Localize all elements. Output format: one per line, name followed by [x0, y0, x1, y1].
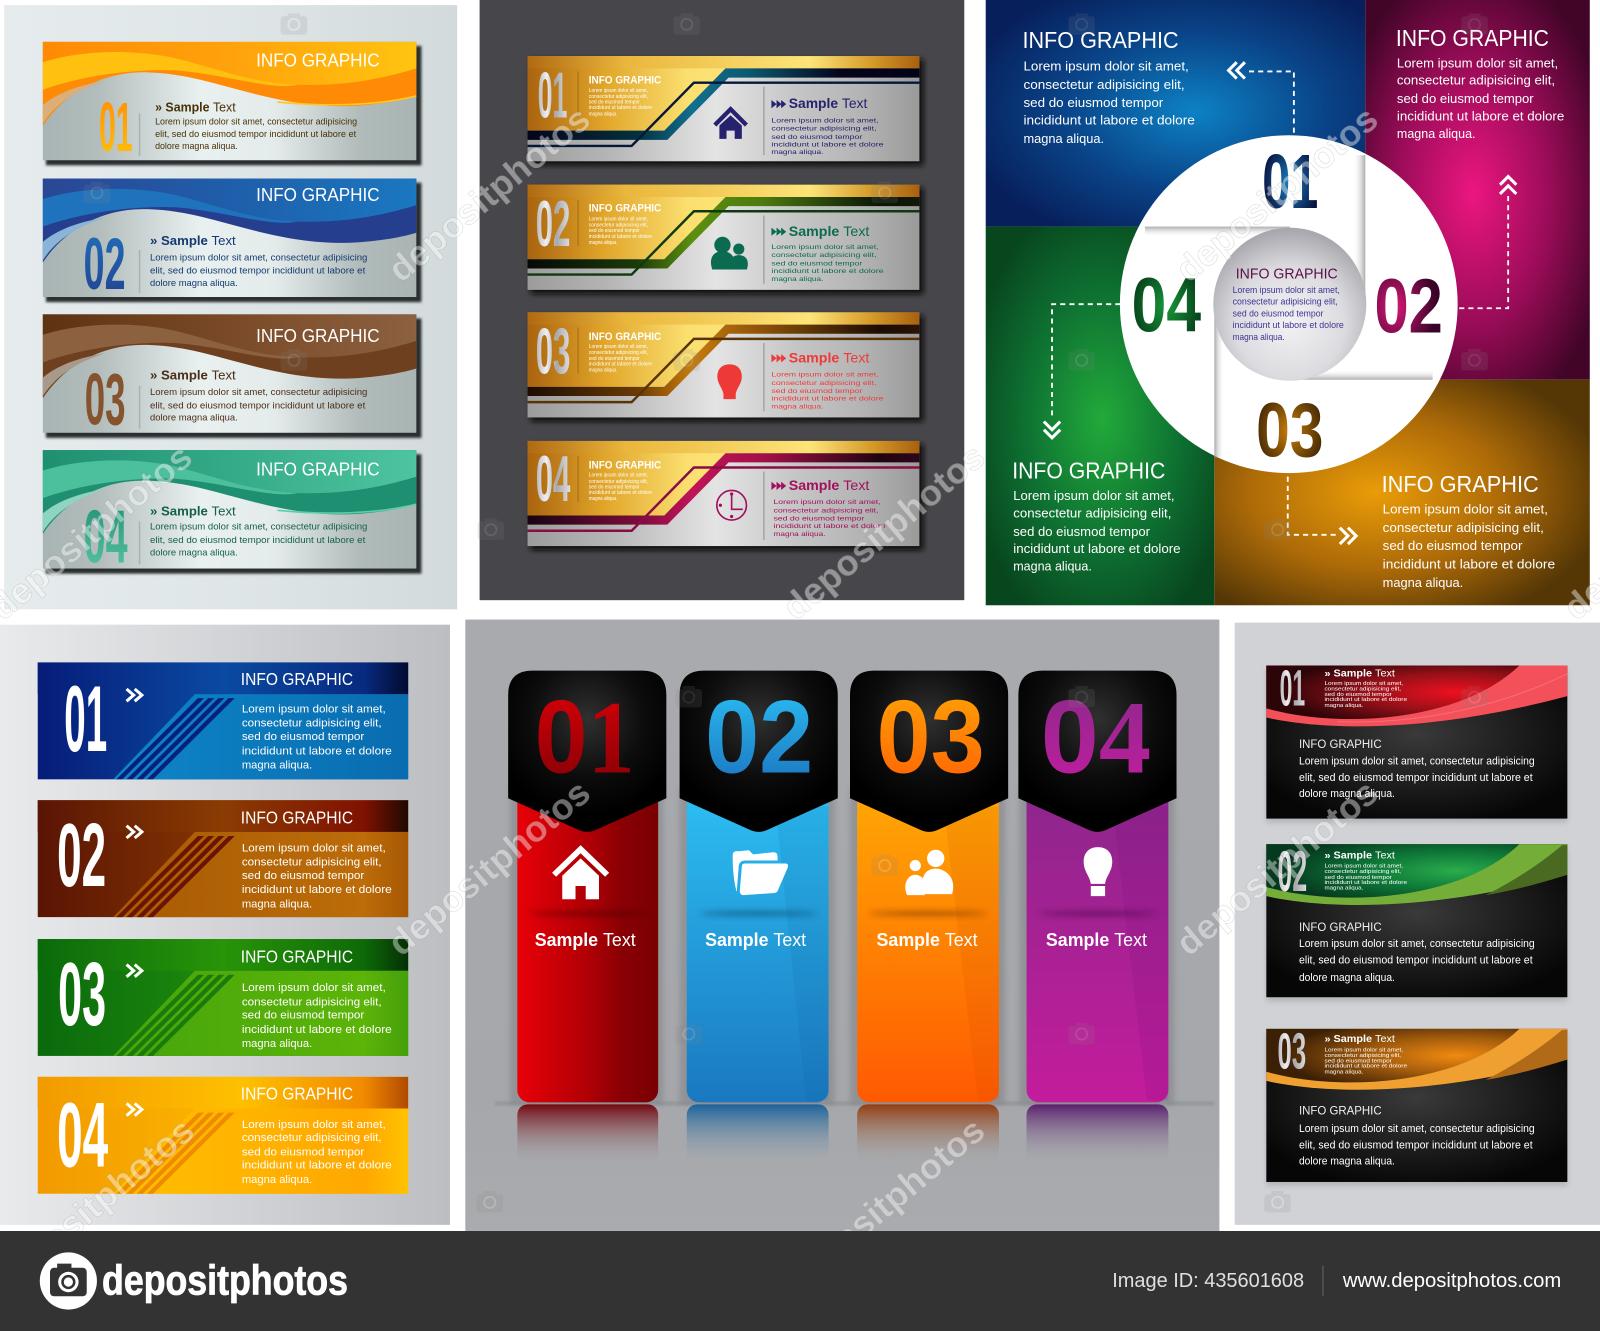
left caption: consectetur adipisicing elit,: [589, 223, 648, 229]
caption: incididunt ut labore et dolore: [1324, 1064, 1407, 1070]
icon: light bulb: [717, 364, 742, 399]
left caption: incididunt ut labore et dolore: [589, 234, 652, 240]
number: 02: [84, 222, 126, 305]
banner: gold 02 green: 02: [536, 187, 570, 260]
text block: [241, 1083, 392, 1186]
text block: dolore magna aliqua.: [1299, 788, 1395, 800]
text block: sed do eiusmod tempor: [242, 1146, 365, 1158]
left caption: magna aliqua.: [589, 368, 617, 374]
orange text block: INFO GRAPHIC: [1382, 471, 1539, 497]
label: Sample Text: [705, 929, 806, 950]
centre text: consectetur adipisicing elit,: [1233, 297, 1338, 307]
caption: Lorem ipsum dolor sit amet,: [1324, 681, 1403, 687]
text block: Lorem ipsum dolor sit amet,: [242, 842, 386, 854]
banner: red 01: 01: [1280, 659, 1305, 716]
heading: INFO GRAPHIC: [256, 49, 380, 70]
panel: gold metallic banners: [480, 0, 964, 600]
magenta text block: incididunt ut labore et dolore: [1397, 108, 1564, 123]
text block: [150, 233, 367, 288]
orange text block: sed do eiusmod tempor: [1383, 538, 1523, 553]
caption: consectetur adipisicing elit,: [1324, 687, 1401, 693]
heading: INFO GRAPHIC: [256, 459, 380, 480]
text block: [241, 947, 392, 1050]
right text block: consectetur adipisicing elit,: [771, 252, 877, 259]
chevrons: [127, 689, 142, 701]
caption: incididunt ut labore et dolore: [1324, 880, 1407, 886]
left caption: [589, 331, 661, 374]
panel: diagonal stripe banners: [0, 625, 450, 1225]
quadrant: orange: [1214, 380, 1590, 605]
text block: dolore magna aliqua.: [150, 547, 238, 557]
blue text block: consectetur adipisicing elit,: [1023, 77, 1185, 92]
panel: wave banners: [4, 5, 457, 609]
tab: orange 03: [850, 671, 1008, 1166]
text block: » Sample Text: [150, 233, 236, 248]
chevrons: [127, 965, 142, 977]
magenta text block: [1396, 25, 1564, 141]
right text block: Sample Text: [789, 350, 870, 365]
text block: incididunt ut labore et dolore: [242, 1160, 392, 1172]
text block: dolore magna aliqua.: [155, 141, 238, 151]
number: 03: [877, 680, 985, 796]
centre text: Lorem ipsum dolor sit amet,: [1233, 285, 1340, 295]
text block: Lorem ipsum dolor sit amet, consectetur adipisicing: [1299, 1123, 1535, 1135]
fold shadows: [1145, 155, 1433, 457]
green text block: [1012, 458, 1181, 574]
right text block: magna aliqua.: [773, 531, 826, 538]
text block: dolore magna aliqua.: [150, 278, 238, 288]
number: 02: [705, 680, 813, 796]
left caption: consectetur adipisicing elit,: [589, 94, 648, 100]
caption: magna aliqua.: [1324, 703, 1363, 709]
green text block: incididunt ut labore et dolore: [1013, 541, 1181, 556]
right text block: [771, 96, 884, 156]
icon: house: [713, 106, 748, 139]
caption: consectetur adipisicing elit,: [1324, 869, 1401, 875]
icon: people: [711, 237, 748, 269]
caption: [1324, 850, 1407, 892]
icon: clock: [717, 490, 746, 520]
right text block: consectetur adipisicing elit,: [773, 507, 879, 514]
icon: light bulb: [1084, 847, 1112, 896]
text block: [1299, 1105, 1535, 1168]
left caption: consectetur adipisicing elit,: [589, 350, 648, 356]
watermark: depositphotos text: depositphotos: [380, 98, 598, 290]
text block: Lorem ipsum dolor sit amet, consectetur adipisicing: [150, 522, 367, 532]
banner: red 01: [1266, 659, 1567, 823]
right text block: sed do eiusmod tempor: [771, 260, 863, 267]
left caption: magna aliqua.: [589, 111, 617, 117]
text block: dolore magna aliqua.: [150, 413, 238, 423]
orange text block: magna aliqua.: [1383, 575, 1463, 590]
banner: blue 01: 01: [64, 666, 107, 771]
blue text block: sed do eiusmod tempor: [1023, 95, 1164, 110]
right text block: Lorem ipsum dolor sit amet,: [773, 499, 881, 506]
watermark: depositphotos text: depositphotos: [380, 772, 598, 964]
panel: vertical tabs: [465, 620, 1219, 1231]
left caption: Lorem ipsum dolor sit amet,: [589, 88, 648, 94]
caption: » Sample Text: [1324, 850, 1395, 861]
number: 01: [535, 680, 635, 796]
left caption: sed do eiusmod tempor: [589, 356, 640, 362]
banner: teal 04: [43, 450, 421, 579]
right text block: incididunt ut labore et dolore: [771, 141, 884, 148]
caption: [1324, 669, 1407, 709]
left caption: Lorem ipsum dolor sit amet,: [589, 473, 648, 479]
green text block: magna aliqua.: [1013, 559, 1092, 574]
text block: » Sample Text: [150, 368, 236, 383]
text block: Lorem ipsum dolor sit amet, consectetur adipisicing: [155, 117, 357, 127]
text block: [1299, 738, 1535, 800]
blue text block: Lorem ipsum dolor sit amet,: [1023, 58, 1189, 73]
chevrons: [127, 826, 142, 838]
text block: elit, sed do eiusmod tempor incididunt ut labore et: [155, 129, 357, 139]
banner: orange 01: [43, 42, 421, 166]
banner: gold 03 red: 03: [536, 315, 570, 388]
caption: sed do eiusmod tempor: [1324, 692, 1392, 698]
right text block: [771, 350, 884, 410]
text block: Lorem ipsum dolor sit amet,: [242, 1119, 386, 1131]
right text block: Lorem ipsum dolor sit amet,: [771, 372, 879, 379]
orange text block: consectetur adipisicing elit,: [1383, 520, 1544, 535]
quadrant: blue: [986, 0, 1365, 227]
text block: Lorem ipsum dolor sit amet,: [242, 982, 386, 994]
chevrons: [127, 1103, 142, 1116]
right text block: magna aliqua.: [771, 276, 824, 283]
banner: green 02: [1266, 840, 1567, 1001]
number 02: 02: [1374, 265, 1443, 350]
number 03: 03: [1256, 388, 1323, 473]
text block: Lorem ipsum dolor sit amet, consectetur adipisicing: [150, 252, 367, 262]
footer bar: [0, 1231, 1600, 1331]
text block: consectetur adipisicing elit,: [242, 1132, 382, 1144]
text block: sed do eiusmod tempor: [242, 731, 365, 743]
heading: INFO GRAPHIC: [256, 325, 380, 346]
text block: INFO GRAPHIC: [1299, 738, 1382, 751]
text block: elit, sed do eiusmod tempor incididunt ut labore et: [150, 400, 366, 410]
blue text block: INFO GRAPHIC: [1022, 27, 1179, 53]
caption: Lorem ipsum dolor sit amet,: [1324, 864, 1403, 870]
centre text: sed do eiusmod tempor: [1233, 308, 1323, 318]
text block: elit, sed do eiusmod tempor incididunt ut labore et: [1299, 772, 1533, 784]
left caption: [589, 75, 661, 117]
banner: yellow 04: 04: [57, 1085, 108, 1187]
caption: [1324, 1034, 1407, 1075]
magenta text block: consectetur adipisicing elit,: [1397, 73, 1555, 88]
number: 03: [1278, 1023, 1306, 1080]
banner: green 02: 02: [1278, 840, 1307, 904]
left caption: magna aliqua.: [589, 240, 617, 246]
text block: [241, 669, 392, 772]
right text block: magna aliqua.: [771, 403, 824, 410]
caption: incididunt ut labore et dolore: [1324, 697, 1407, 703]
banner: orange 01: 01: [99, 88, 133, 166]
number 04: 04: [1132, 264, 1201, 349]
banner: gold 02 green: [528, 185, 923, 294]
banner: gold 01 navy: 01: [538, 58, 567, 131]
banner: brown 02: [38, 800, 408, 917]
label: Sample Text: [535, 929, 636, 950]
text block: Lorem ipsum dolor sit amet, consectetur adipisicing: [1299, 938, 1535, 950]
banner: orange 03: [1266, 1023, 1567, 1186]
banner: gold 01 navy: [528, 56, 923, 165]
text block: elit, sed do eiusmod tempor incididunt ut labore et: [1299, 955, 1533, 967]
right text block: incididunt ut labore et dolore: [771, 268, 884, 275]
right text block: Sample Text: [789, 478, 870, 493]
text block: INFO GRAPHIC: [1299, 1105, 1382, 1118]
watermark: depositphotos text: depositphotos: [1168, 98, 1385, 290]
image id: Image ID: 435601608: [1112, 1270, 1304, 1292]
left caption: incididunt ut labore et dolore: [589, 490, 652, 496]
text block: dolore magna aliqua.: [1299, 972, 1395, 984]
quadrant: green: [986, 227, 1214, 605]
caption: Lorem ipsum dolor sit amet,: [1324, 1047, 1403, 1053]
magenta text block: INFO GRAPHIC: [1396, 25, 1549, 51]
text block: Lorem ipsum dolor sit amet, consectetur adipisicing: [150, 387, 367, 397]
arrow: orange dashed: [1288, 477, 1356, 544]
centre text: [1233, 267, 1344, 342]
right text block: Sample Text: [789, 96, 868, 111]
text block: sed do eiusmod tempor: [242, 1010, 365, 1022]
green text block: consectetur adipisicing elit,: [1013, 505, 1171, 520]
watermark: depositphotos text: depositphotos: [775, 1110, 993, 1301]
left caption: [589, 202, 661, 246]
text block: Lorem ipsum dolor sit amet,: [242, 703, 386, 715]
number 01: 01: [1262, 140, 1318, 225]
text block: magna aliqua.: [242, 1038, 312, 1050]
banner: yellow 04: [38, 1077, 408, 1194]
caption: magna aliqua.: [1324, 886, 1363, 892]
number: 04: [84, 495, 128, 579]
right text block: Sample Text: [789, 224, 870, 239]
right text block: incididunt ut labore et dolore: [771, 396, 884, 403]
caption: consectetur adipisicing elit,: [1324, 1053, 1401, 1059]
white ring: [1120, 135, 1458, 473]
blue text block: [1022, 27, 1195, 146]
text block: [1299, 921, 1535, 984]
green text block: sed do eiusmod tempor: [1013, 524, 1151, 539]
text block: [150, 503, 367, 557]
left caption: consectetur adipisicing elit,: [589, 479, 648, 485]
text block: magna aliqua.: [242, 1174, 312, 1186]
label: Sample Text: [877, 929, 978, 950]
text block: » Sample Text: [155, 99, 236, 114]
icon: people: [905, 850, 953, 895]
blue text block: incididunt ut labore et dolore: [1023, 113, 1195, 128]
right text block: sed do eiusmod tempor: [771, 134, 863, 141]
centre text: INFO GRAPHIC: [1236, 267, 1338, 283]
text block: consectetur adipisicing elit,: [242, 718, 382, 730]
heading: INFO GRAPHIC: [256, 184, 380, 205]
caption: magna aliqua.: [1324, 1069, 1363, 1075]
green text block: Lorem ipsum dolor sit amet,: [1013, 488, 1174, 503]
icon: folder: [733, 850, 788, 895]
banner: blue 01: [38, 662, 408, 779]
right text block: Lorem ipsum dolor sit amet,: [771, 244, 879, 251]
text block: Lorem ipsum dolor sit amet, consectetur adipisicing: [1299, 756, 1535, 768]
text block: incididunt ut labore et dolore: [242, 884, 392, 896]
left caption: sed do eiusmod tempor: [589, 484, 640, 490]
orange text block: incididunt ut labore et dolore: [1383, 557, 1555, 572]
right text block: magna aliqua.: [771, 149, 824, 156]
arrow: magenta dashed: [1459, 177, 1516, 308]
text block: consectetur adipisicing elit,: [242, 857, 382, 869]
text block: INFO GRAPHIC: [241, 669, 353, 689]
logo mark: [40, 1252, 97, 1310]
caption: » Sample Text: [1324, 669, 1395, 680]
left caption: sed do eiusmod tempor: [589, 228, 640, 234]
text block: [155, 99, 357, 151]
text block: consectetur adipisicing elit,: [242, 996, 382, 1008]
left caption: Lorem ipsum dolor sit amet,: [589, 344, 648, 350]
green text block: INFO GRAPHIC: [1012, 458, 1165, 484]
right text block: incididunt ut labore et dolore: [773, 523, 886, 530]
text block: INFO GRAPHIC: [241, 947, 353, 967]
centre text: magna aliqua.: [1233, 332, 1285, 342]
banner: brown 02: 02: [57, 806, 106, 906]
banner: brown 03: 03: [85, 358, 126, 441]
text block: INFO GRAPHIC: [1299, 921, 1382, 934]
blue text block: magna aliqua.: [1023, 131, 1104, 146]
caption: » Sample Text: [1324, 1034, 1395, 1045]
tab: blue 02: [680, 671, 838, 1166]
left caption: INFO GRAPHIC: [589, 75, 661, 87]
left caption: INFO GRAPHIC: [589, 202, 661, 214]
text block: [150, 368, 367, 423]
left caption: INFO GRAPHIC: [589, 331, 661, 343]
watermark: camera marks: [84, 13, 1488, 1213]
text block: magna aliqua.: [242, 898, 312, 910]
text block: elit, sed do eiusmod tempor incididunt ut labore et: [150, 535, 366, 545]
caption: sed do eiusmod tempor: [1324, 1059, 1392, 1065]
banner: gold 04 crimson: 04: [536, 442, 570, 515]
tab: purple 04: [1018, 671, 1177, 1166]
text block: magna aliqua.: [242, 760, 312, 772]
right text block: consectetur adipisicing elit,: [771, 126, 877, 133]
left caption: Lorem ipsum dolor sit amet,: [589, 216, 648, 222]
right text block: sed do eiusmod tempor: [773, 516, 865, 523]
text block: elit, sed do eiusmod tempor incididunt ut labore et: [150, 266, 366, 276]
number: 04: [1041, 680, 1151, 796]
banner: green 03: [38, 939, 408, 1056]
right text block: consectetur adipisicing elit,: [771, 380, 877, 387]
arrow: green dashed: [1044, 304, 1120, 438]
magenta text block: magna aliqua.: [1397, 126, 1476, 141]
watermark: depositphotos text: depositphotos: [775, 436, 993, 628]
text block: dolore magna aliqua.: [1299, 1156, 1395, 1168]
left caption: incididunt ut labore et dolore: [589, 105, 652, 111]
text block: incididunt ut labore et dolore: [242, 745, 392, 757]
banner: brown 03: [43, 314, 421, 441]
text block: INFO GRAPHIC: [241, 808, 353, 828]
caption: sed do eiusmod tempor: [1324, 875, 1392, 881]
icon: house: [552, 845, 609, 899]
right text block: [771, 478, 886, 538]
arrow: blue dashed: [1229, 62, 1294, 133]
text block: INFO GRAPHIC: [241, 1083, 353, 1103]
text block: » Sample Text: [150, 503, 236, 518]
orange text block: Lorem ipsum dolor sit amet,: [1383, 501, 1548, 516]
logo wordmark: depositphotos: [102, 1256, 348, 1303]
text block: sed do eiusmod tempor: [242, 870, 365, 882]
banner: gold 04 crimson: [528, 441, 923, 550]
centre text: incididunt ut labore et dolore: [1233, 320, 1344, 330]
right text block: sed do eiusmod tempor: [771, 388, 863, 395]
website: www.depositphotos.com: [1342, 1270, 1561, 1292]
right text block: Lorem ipsum dolor sit amet,: [771, 117, 879, 124]
text block: [241, 808, 392, 910]
left caption: [589, 460, 661, 502]
tab: red 01: [508, 671, 666, 1166]
magenta text block: sed do eiusmod tempor: [1397, 91, 1534, 106]
magenta text block: Lorem ipsum dolor sit amet,: [1397, 55, 1558, 70]
panel: dark banners: [1235, 623, 1600, 1225]
banner: blue 02: [43, 179, 421, 305]
centre sphere: [1213, 228, 1366, 381]
label: Sample Text: [1046, 929, 1147, 950]
left caption: magna aliqua.: [589, 496, 617, 502]
banner: gold 03 red: [528, 312, 923, 422]
text block: elit, sed do eiusmod tempor incididunt ut labore et: [1299, 1139, 1533, 1151]
left caption: INFO GRAPHIC: [589, 460, 661, 472]
banner: green 03: 03: [58, 945, 106, 1045]
panel: circular four quadrant diagram: [986, 0, 1590, 605]
right text block: [771, 224, 884, 283]
left caption: incididunt ut labore et dolore: [589, 361, 652, 367]
left caption: sed do eiusmod tempor: [589, 100, 640, 106]
orange text block: [1382, 471, 1555, 590]
quadrant: magenta: [1365, 0, 1590, 380]
watermark: depositphotos text: depositphotos: [1168, 772, 1385, 964]
floor line: [495, 1101, 1214, 1105]
text block: incididunt ut labore et dolore: [242, 1024, 392, 1036]
